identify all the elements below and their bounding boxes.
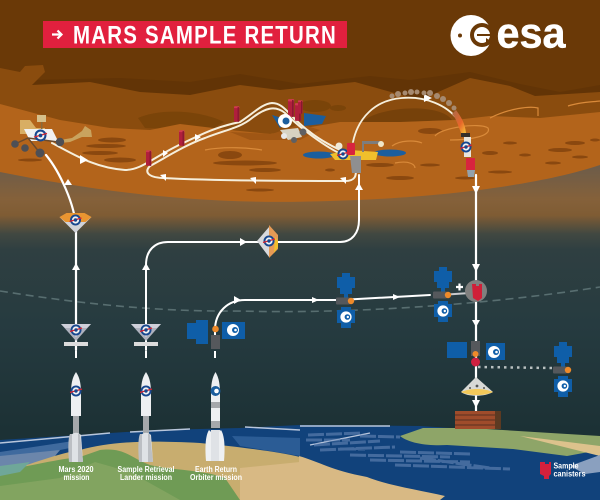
sample return facility [455, 411, 501, 429]
flight paths [46, 98, 476, 412]
ascent exhaust plume [390, 89, 466, 133]
path: lander cruise [146, 175, 359, 350]
background: Martian surface [0, 101, 600, 205]
mission label: Sample Retrieval Lander: Lander mission [120, 473, 172, 482]
path: Mars 2020 descent [46, 155, 76, 350]
orbiter: departing [553, 342, 572, 397]
land: northern coast [400, 428, 600, 456]
sample canisters on surface [146, 99, 303, 166]
title banner [43, 21, 347, 50]
legend: sample canisters: canisters [554, 470, 586, 478]
background: distant ridges [0, 65, 600, 200]
dotted return path [478, 367, 552, 368]
orbiter: capsule release [447, 341, 505, 366]
mission label: Earth Return Orbiter: Earth Return [195, 465, 237, 474]
orbiter: after launch [187, 320, 245, 349]
Earth: ocean and land [0, 425, 600, 500]
orbiter: at Mars [433, 267, 452, 322]
path arrowheads [64, 94, 480, 408]
cruise capsule: lander [131, 324, 161, 346]
mission label: Mars 2020 [58, 465, 94, 482]
rocket: Earth Return Orbiter [205, 351, 225, 461]
ocean: mottled shallows [306, 433, 510, 469]
legend: sample canisters [540, 462, 586, 479]
ESA logo: esa [496, 10, 567, 58]
entry capsule: Mars 2020 [60, 213, 92, 233]
path: tether [440, 293, 470, 295]
background: Martian sky [0, 0, 600, 200]
Mars ascent vehicle in flight [460, 133, 475, 177]
rover [11, 115, 92, 158]
Earth entry capsule [461, 377, 493, 396]
land: southern coast [299, 456, 445, 500]
fetch rover [272, 113, 326, 143]
orbit dashed line [0, 287, 600, 312]
rocket: Mars 2020 [68, 351, 83, 462]
mission label: Earth Return Orbiter [190, 465, 242, 482]
rocket: Sample Retrieval Lander [138, 351, 153, 462]
title text: MARS SAMPLE RETURN [73, 22, 337, 50]
entry capsule: lander [257, 225, 278, 258]
mission label: Earth Return Orbiter: Orbiter mission [190, 473, 242, 482]
mission label: Sample Retrieval Lander [118, 465, 174, 482]
background: space and Mars limb [0, 165, 600, 500]
orbit sample container [456, 280, 487, 302]
path: orbiter cruise [215, 295, 430, 348]
mission label: Mars 2020: mission [64, 473, 90, 482]
path: sample fetch return [147, 108, 356, 181]
legend: sample canisters: Sample [554, 462, 579, 470]
lander platform [303, 141, 406, 173]
path: Mars ascent arc [353, 98, 458, 142]
ESA logo [450, 10, 567, 58]
mission label: Sample Retrieval Lander: Sample Retrieval [118, 465, 174, 474]
cruise capsule: Mars 2020 [61, 324, 91, 346]
path: rover traverse [52, 103, 345, 170]
title arrow [52, 30, 62, 38]
path: Earth return [475, 175, 477, 412]
mission label: Mars 2020: Mars 2020 [58, 465, 94, 474]
orbiter: cruise [336, 273, 355, 328]
